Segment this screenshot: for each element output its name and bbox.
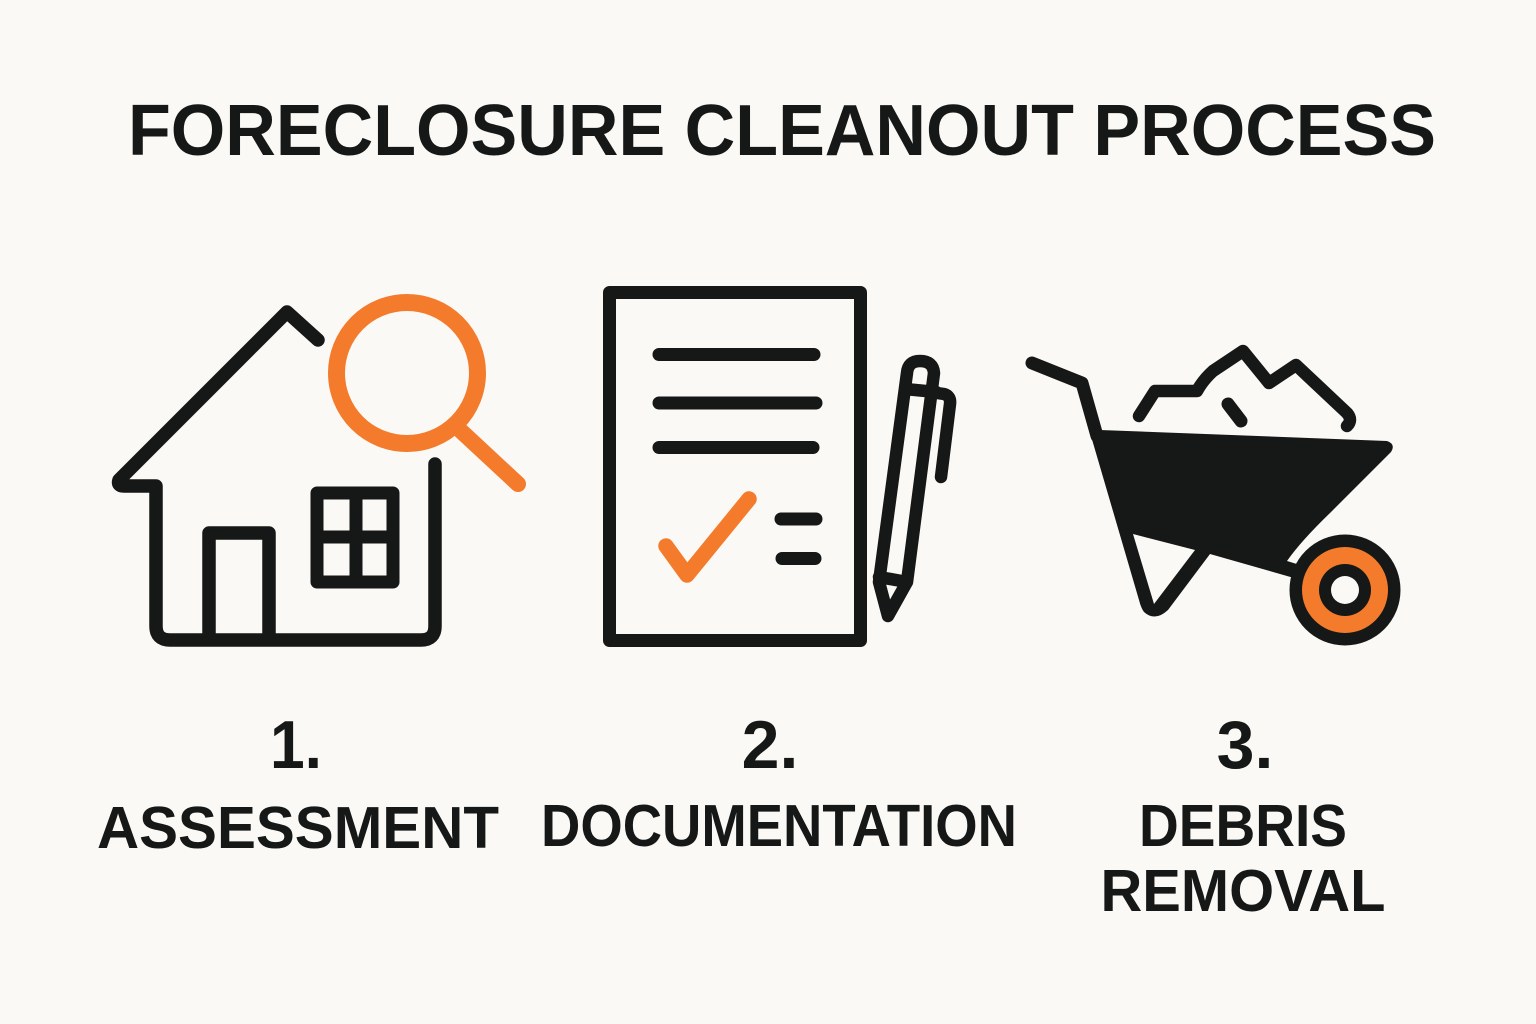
magnifying glass [336, 302, 518, 484]
icon: house with magnifying glass [119, 302, 518, 640]
label: step 2: DOCUMENTATION [541, 793, 1017, 859]
paper [610, 292, 860, 640]
text lines [659, 354, 816, 448]
door [209, 533, 269, 636]
title: FORECLOSURE CLEANOUT PROCESS [128, 91, 1436, 171]
label: step 1: ASSESSMENT [97, 795, 499, 861]
short lines [781, 519, 816, 558]
house outline [119, 312, 435, 640]
label: step 1 [97, 707, 499, 861]
label: step 1: 1. [270, 707, 322, 783]
handle [1032, 363, 1097, 436]
window [317, 493, 393, 582]
check mark [666, 499, 749, 575]
wheel [1290, 534, 1400, 646]
label: step 3: REMOVAL [1100, 858, 1386, 924]
icon: wheelbarrow [1032, 351, 1400, 646]
pen [879, 361, 950, 616]
tray [1091, 430, 1393, 617]
label: step 2: 2. [742, 707, 798, 783]
debris [1139, 351, 1350, 426]
label: step 2 [541, 707, 1017, 859]
label: step 3: DEBRIS [1139, 793, 1347, 859]
label: step 3: 3. [1217, 707, 1273, 783]
icon: document with checklist and pen [610, 292, 950, 640]
label: step 3 [1100, 707, 1386, 924]
